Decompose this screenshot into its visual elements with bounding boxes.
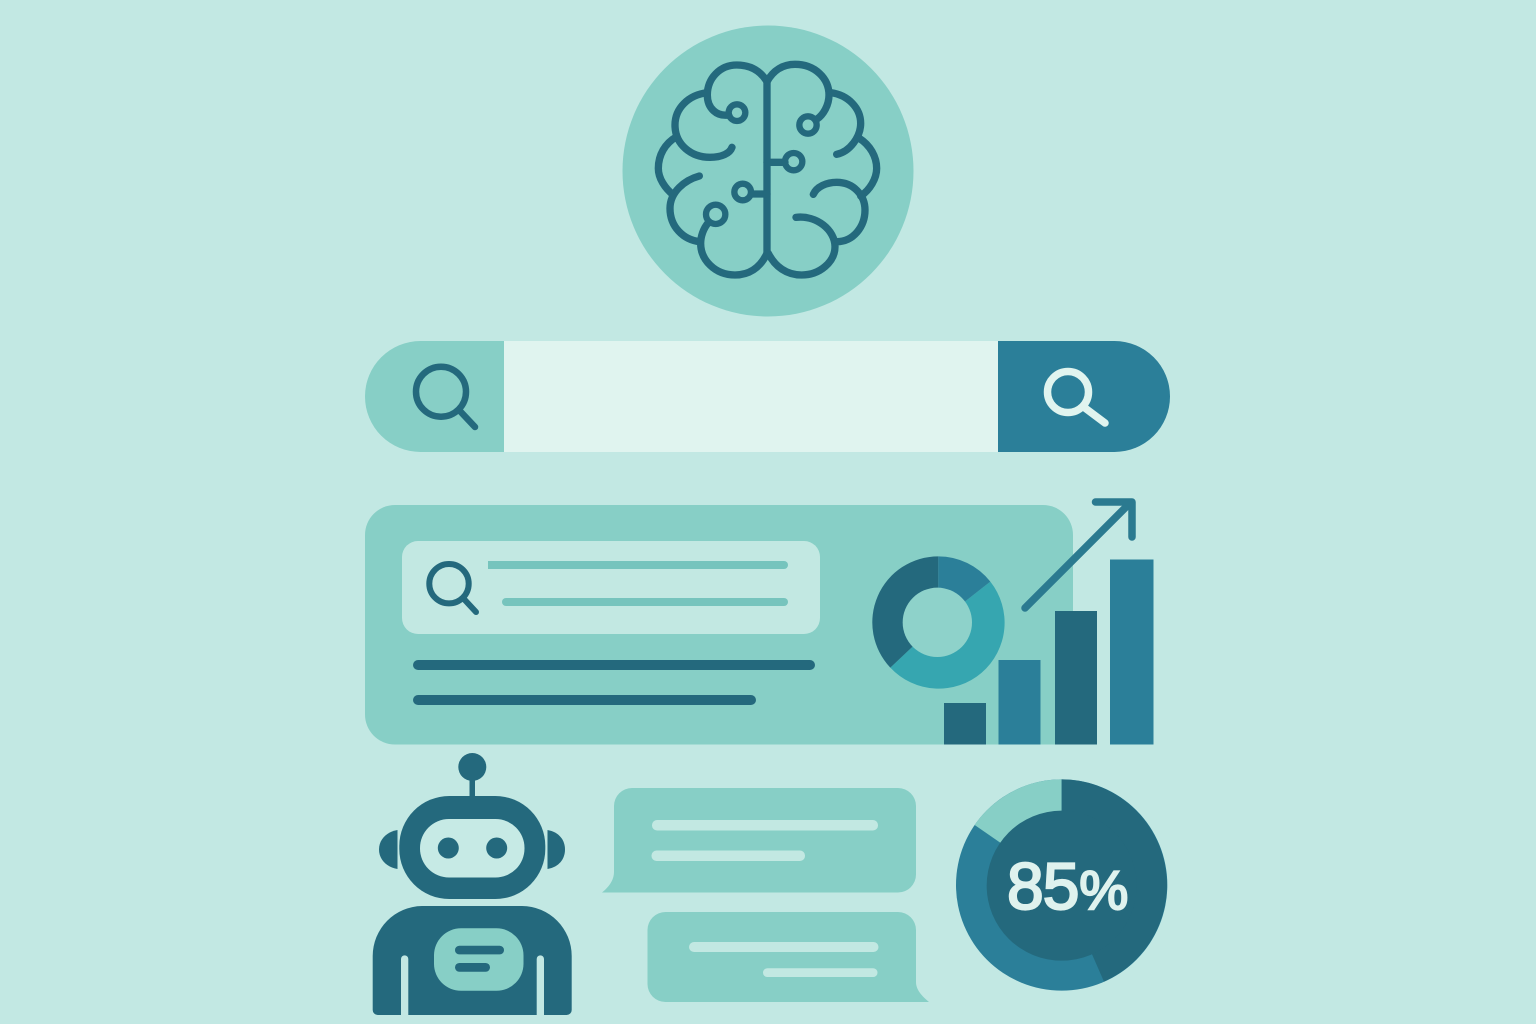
pie chart: 85% [956, 779, 1167, 991]
bar 1 [944, 703, 986, 744]
search bar right button [998, 341, 1170, 452]
donut mid segment [938, 556, 990, 622]
bar 4 [1110, 560, 1154, 744]
donut teal segment [890, 582, 1005, 689]
bar 2 [998, 660, 1040, 744]
icon: brain with circuit nodes [622, 26, 914, 316]
robot ears [379, 830, 565, 869]
result line 1 [488, 561, 788, 569]
robot antenna [458, 753, 486, 798]
panel: results card [365, 505, 1073, 744]
brain background circle [622, 26, 914, 316]
robot eyes [438, 838, 507, 858]
card background [365, 505, 1073, 744]
result line 2 [502, 598, 788, 606]
icon: card magnifier [429, 564, 476, 612]
bubble 1 shape [602, 788, 916, 892]
text line 2 [413, 695, 756, 705]
bubble 2 lines [689, 942, 878, 977]
donut hole [903, 588, 972, 657]
robot chest screen [434, 928, 524, 991]
robot head [399, 796, 545, 899]
pie rings [956, 779, 1167, 991]
search input field [504, 341, 998, 452]
ring light segment [975, 779, 1062, 885]
icon: left magnifier [416, 367, 475, 427]
icon: robot [373, 753, 572, 1015]
chat bubble 1 [602, 788, 916, 892]
robot face [420, 819, 524, 878]
robot chest lines [455, 946, 504, 972]
bubble 2 shape [648, 912, 929, 1002]
bar chart [944, 560, 1154, 744]
icon: right magnifier [1048, 372, 1105, 423]
robot body [373, 906, 572, 1015]
inner search box [402, 541, 820, 634]
arrow: growth trend [1025, 502, 1132, 608]
search bar [365, 341, 1170, 452]
bubble 1 lines [652, 820, 878, 861]
search bar left cap [365, 341, 504, 452]
pie centre disc [987, 811, 1137, 961]
donut dark segment [872, 556, 938, 668]
chat bubble 2 [648, 912, 929, 1002]
bar 3 [1055, 611, 1097, 744]
ring dark segment [1062, 779, 1167, 982]
donut chart [872, 556, 1005, 689]
robot arm slits [401, 955, 544, 1015]
ring mid segment [956, 779, 1167, 991]
brain outline and circuits [658, 64, 877, 275]
percentage label: 85% [1007, 849, 1128, 923]
text line 1 [413, 660, 815, 670]
